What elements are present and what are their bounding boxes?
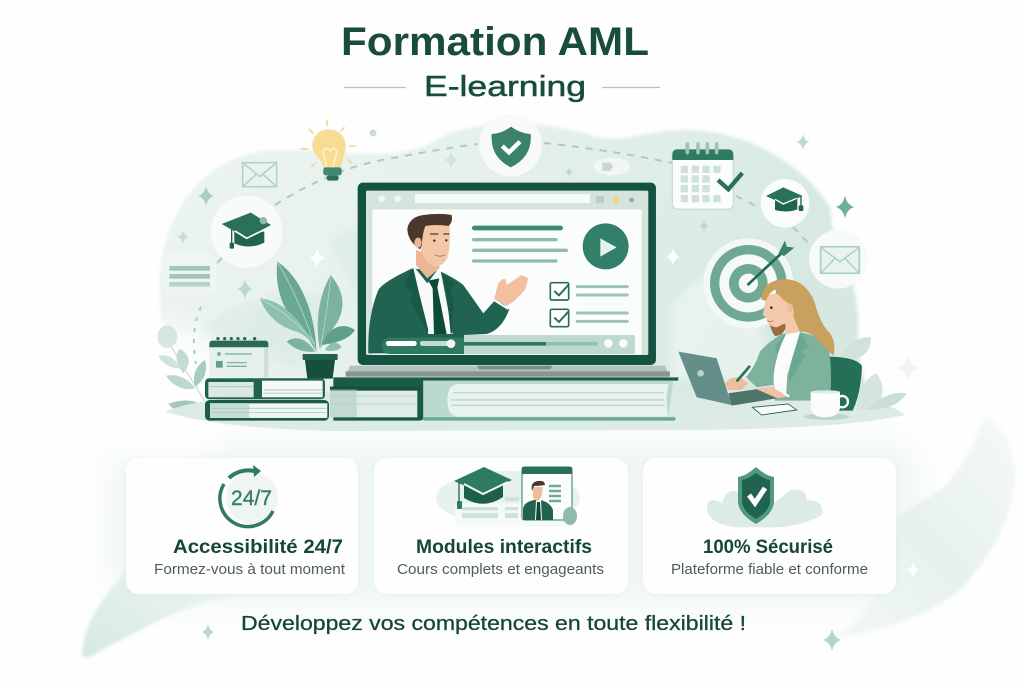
icon: target with arrow [703, 238, 794, 328]
potted plant [260, 262, 355, 379]
right foliage [842, 337, 907, 410]
card text: Plateforme fiable et conforme [671, 561, 868, 578]
video controls [382, 335, 635, 354]
play button [583, 223, 629, 269]
title: Formation AML [341, 20, 649, 64]
title [341, 20, 660, 103]
icon: shield with leaves [707, 467, 822, 528]
notebook [752, 404, 797, 415]
panel: Modules interactifs [374, 458, 628, 594]
book stack left [205, 378, 329, 421]
panel: 100% Sécurisé [643, 458, 896, 594]
card text: Formez-vous à tout moment [154, 561, 346, 578]
icon: cap and video card [436, 467, 580, 527]
lesson text lines [472, 226, 568, 263]
card text: Cours complets et engageants [397, 561, 604, 578]
icon: calendar with check [672, 144, 742, 209]
card title: Modules interactifs [416, 537, 592, 558]
coffee cup [804, 390, 849, 420]
left foliage branch [157, 325, 206, 415]
large book under laptop [330, 377, 678, 421]
icon: 24/7 clock: 24/7 [231, 487, 272, 510]
icon: light bulb [301, 121, 355, 181]
small desk calendar [209, 337, 268, 377]
laptop frame [358, 183, 656, 365]
woman at laptop [678, 279, 862, 411]
panel: Accessibilité 24/7 [126, 458, 358, 594]
decorative sparkles [177, 130, 919, 652]
presenter [368, 214, 528, 354]
subtitle: E-learning [424, 71, 586, 103]
icon: graduation cap bubble right [761, 179, 809, 228]
card title: Accessibilité 24/7 [173, 537, 343, 558]
browser window [366, 191, 648, 355]
scene right: calendar, cap, target, envelope, woman [672, 144, 907, 420]
icon: graduation cap bubble left [211, 196, 283, 268]
tagline: Développez vos compétences en toute flexibilité ! [241, 612, 746, 635]
icon: envelope left [243, 163, 277, 187]
icon: shield bubble top [479, 114, 630, 176]
table surface [165, 390, 905, 431]
laptop base [346, 366, 670, 377]
laptop [346, 183, 670, 377]
background wash: scene blob and swooshes [82, 123, 1015, 657]
dashed connector lines [194, 143, 812, 364]
card title: 100% Sécurisé [703, 537, 833, 558]
icon: envelope bubble right [809, 230, 868, 289]
icon: 24/7 clock [220, 465, 278, 527]
icon: chat bubble [163, 253, 217, 298]
checklist [550, 283, 627, 327]
